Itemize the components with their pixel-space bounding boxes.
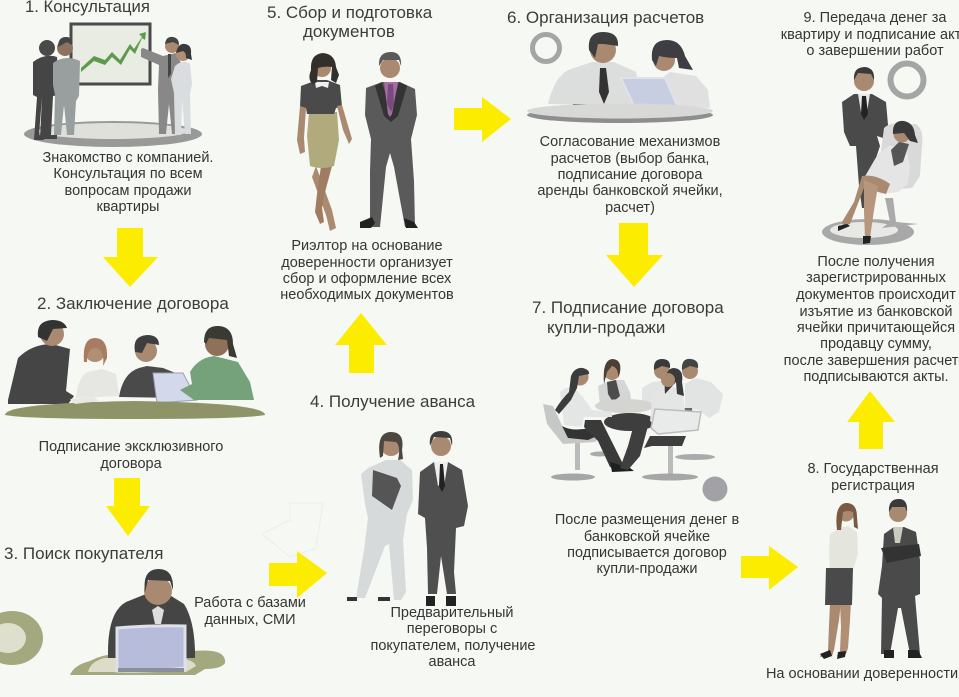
arrow: step 2 to 3 [106, 478, 150, 536]
decorative dot: step 7 [702, 476, 728, 502]
text: step 9 description: ячейки причитающейся [797, 320, 955, 336]
text: step 7 description: подписывается договор [567, 545, 727, 561]
text: step 5 description [280, 238, 454, 303]
arrow: step 1 to 2 [103, 228, 158, 287]
heading: step 8 [807, 461, 939, 494]
illustration: woman and man standing [347, 431, 468, 606]
decorative ring: step 6 [532, 34, 560, 62]
heading: step 7: 7. Подписание договора [532, 298, 724, 317]
text: step 5 description: необходимых документов [280, 287, 454, 303]
text: step 3 description: Работа с базами [194, 595, 306, 611]
text: step 4 description: аванса [428, 654, 476, 670]
heading: step 7 [532, 298, 724, 337]
step 4: advance [310, 392, 535, 670]
illustration: man and woman at table [527, 32, 713, 123]
heading: step 5: 5. Сбор и подготовка [267, 3, 433, 22]
text: step 9 description: После получения [817, 254, 935, 270]
arrow: step 8 to 9 [847, 391, 895, 449]
text: step 9 description: документов происходит [796, 287, 956, 303]
text: step 9 description: зарегистрированных [806, 270, 947, 286]
heading: step 7: купли-продажи [547, 318, 665, 337]
heading: step 2: 2. Заключение договора [37, 294, 229, 313]
text: step 9 description: подписываются акты. [803, 369, 949, 385]
text: step 2 description: Подписание эксклюзивного [39, 439, 223, 455]
heading: step 5: документов [303, 22, 395, 41]
text: step 3 description: данных, СМИ [204, 612, 296, 628]
arrow: step 5 to 6 [454, 97, 511, 142]
heading: step 9: квартиру и подписание акт [781, 27, 959, 43]
heading: step 6: 6. Организация расчетов [507, 8, 704, 27]
text: step 6 description: подписание договора [558, 167, 703, 183]
illustration: meeting at round table with chairs [543, 359, 723, 480]
decorative ring: step 3 [0, 611, 43, 665]
text: step 1 description: Консультация по всем [53, 166, 203, 182]
ghost arrow outline [262, 503, 323, 557]
arrow: step 4 to 5 [335, 313, 387, 373]
text: step 1 description: квартиры [97, 199, 159, 215]
text: step 5 description: сбор и оформление всех [283, 271, 452, 287]
text: step 2 description [39, 439, 223, 472]
step 1: consultation [24, 0, 213, 215]
text: step 4 description: покупателем, получение [371, 638, 535, 654]
arrow: step 6 to 7 [606, 223, 663, 287]
text: step 5 description: Риэлтор на основание [291, 238, 443, 254]
text: step 4 description: Предварительный [390, 605, 514, 621]
text: step 6 description: Согласование механизмов [540, 134, 721, 150]
text: step 9 description: продавцу сумму, [820, 336, 932, 352]
illustration: woman and man in suit [297, 52, 418, 231]
text: step 7 description: После размещения денег в [555, 512, 739, 528]
step 5: documents [267, 3, 454, 303]
text: step 4 description [371, 605, 535, 670]
illustration: standing man and seated woman [822, 67, 922, 245]
heading: step 4: 4. Получение аванса [310, 392, 476, 411]
text: step 6 description: аренды банковской ячейки, [537, 183, 723, 199]
text: step 1 description: вопросам продажи [65, 183, 191, 199]
step 8: registration [766, 461, 958, 682]
text: step 7 description [555, 512, 739, 577]
heading: step 3: 3. Поиск покупателя [4, 544, 163, 563]
text: step 1 description: Знакомство с компанией. [43, 150, 213, 166]
text: step 1 description [43, 150, 213, 215]
step 9: money transfer and acts [781, 10, 959, 385]
step 6: settlement [507, 8, 723, 216]
text: step 6 description [537, 134, 723, 216]
heading: step 5 [267, 3, 433, 41]
heading: step 9: о завершении работ [806, 43, 944, 59]
illustration: man at laptop [70, 569, 225, 675]
step 3: buyer search [0, 544, 306, 675]
illustration: meeting at table [5, 320, 265, 419]
arrow: step 3 to 4 [269, 551, 327, 598]
text: step 5 description: доверенности организует [281, 255, 453, 271]
text: step 9 description [784, 254, 959, 385]
text: step 7 description: банковской ячейке [584, 529, 710, 545]
heading: step 9 [781, 10, 959, 59]
text: step 6 description: расчет) [605, 200, 655, 216]
text: step 9 description: изъятие из банковской [799, 304, 953, 320]
illustration: presentation at chart board [24, 24, 202, 147]
arrow: step 7 to 8 [741, 546, 798, 590]
text: step 2 description: договора [100, 456, 163, 472]
text: step 8 description: На основании доверенности [766, 666, 958, 682]
heading: step 9: 9. Передача денег за [804, 10, 947, 26]
text: step 3 description [194, 595, 306, 628]
heading: step 8: 8. Государственная [807, 461, 939, 477]
step 2: contract [5, 294, 265, 472]
step 7: purchase contract [532, 298, 739, 577]
text: step 6 description: расчетов (выбор банка, [551, 151, 709, 167]
text: step 7 description: купли-продажи [597, 561, 697, 577]
heading: step 8: регистрация [831, 478, 915, 494]
illustration: woman and man with folded arms [820, 499, 922, 659]
decorative ring: step 9 [890, 64, 924, 96]
text: step 4 description: переговоры с [407, 621, 497, 637]
